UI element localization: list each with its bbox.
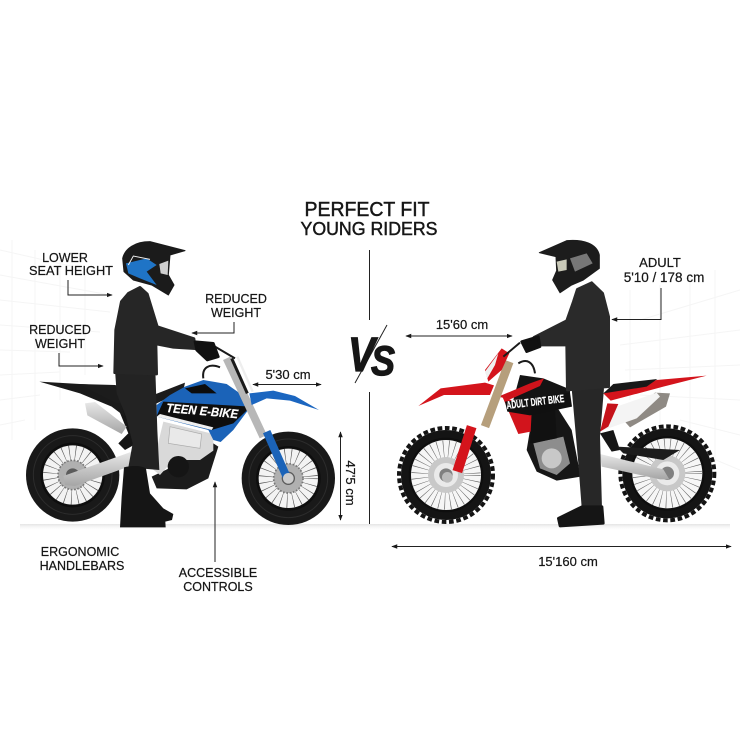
black number panel	[157, 402, 251, 430]
label: reduced weight right: WEIGHT	[211, 306, 261, 320]
dimension: 15'60 cm: 15'60 cm	[436, 317, 488, 332]
red scoop	[498, 378, 544, 399]
red lower shroud	[502, 395, 532, 434]
ground shadow	[20, 524, 730, 531]
title: PERFECT FIT	[304, 198, 430, 221]
helmet	[123, 242, 185, 295]
number plate	[485, 348, 509, 382]
number panel	[505, 393, 572, 415]
tank	[513, 375, 570, 400]
front fender	[249, 391, 319, 410]
dimension: 47'5 cm	[340, 432, 358, 520]
label: ergonomic handlebars: HANDLEBARS	[40, 559, 124, 573]
label: reduced weight right	[192, 292, 267, 333]
radiator	[530, 408, 557, 443]
swingarm	[600, 454, 669, 479]
label: reduced weight left	[29, 323, 103, 366]
rider torso	[534, 283, 609, 390]
dimension: 5'30 cm: 5'30 cm	[265, 367, 311, 382]
label: reduced weight right: REDUCED	[205, 292, 267, 306]
adult dirt bike and adult rider	[399, 240, 714, 526]
label: ergonomic handlebars	[40, 545, 124, 573]
front wheel	[242, 432, 335, 525]
white side panel	[600, 393, 660, 432]
label: adult height: 5'10 / 178 cm	[624, 270, 704, 285]
exhaust	[623, 393, 670, 427]
battery pack	[152, 422, 213, 475]
glove	[522, 337, 540, 352]
dimension: 5'30 cm	[253, 367, 321, 384]
center divider and VS mark	[348, 250, 395, 524]
boot	[558, 507, 603, 526]
handlebar	[203, 347, 235, 378]
teen e-bike logo: TEEN E-BIKE	[166, 401, 239, 421]
dimension: 47'5 cm: 47'5 cm	[343, 460, 358, 506]
label: accessible controls: ACCESSIBLE	[179, 566, 257, 580]
label: lower seat height: SEAT HEIGHT	[29, 264, 113, 278]
rider legs	[115, 370, 159, 470]
label: reduced weight left: WEIGHT	[35, 337, 85, 351]
label: ergonomic handlebars: ERGONOMIC	[41, 545, 119, 559]
engine	[527, 407, 581, 481]
fork	[227, 358, 263, 437]
title: YOUNG RIDERS	[300, 219, 438, 239]
rear wheel	[620, 426, 714, 520]
teen e-bike and young rider	[26, 242, 335, 527]
label: adult height	[612, 255, 704, 320]
rear wheel	[26, 428, 119, 522]
seat	[603, 379, 657, 393]
label: accessible controls	[179, 482, 257, 594]
label: adult height: ADULT	[639, 255, 681, 270]
blue tank	[157, 380, 251, 442]
handlebar	[503, 343, 535, 373]
label: reduced weight left: REDUCED	[29, 323, 91, 337]
helmet	[539, 240, 599, 293]
rider torso	[115, 287, 195, 374]
rear fender	[603, 376, 707, 401]
label: accessible controls: CONTROLS	[183, 580, 253, 594]
rear subframe	[113, 397, 137, 450]
label: lower seat height: LOWER	[42, 251, 88, 265]
title	[300, 198, 438, 239]
fork	[485, 362, 509, 427]
dimension: 15'60 cm	[406, 317, 512, 336]
swingarm	[63, 452, 133, 486]
rear fender and seat	[39, 382, 125, 417]
exhaust	[85, 402, 127, 434]
center divider and VS mark: S	[371, 337, 395, 384]
motor housing	[152, 443, 218, 489]
center divider and VS mark: V	[348, 329, 378, 382]
adult dirt bike logo: ADULT DIRT BIKE	[506, 393, 565, 412]
rear frame	[600, 430, 620, 452]
boots	[120, 466, 173, 527]
dimension: 15'160 cm: 15'160 cm	[538, 554, 598, 569]
front wheel	[399, 428, 493, 522]
rider leg	[572, 388, 604, 508]
label: lower seat height	[29, 251, 113, 295]
front fender	[418, 383, 494, 406]
glove	[195, 342, 218, 360]
